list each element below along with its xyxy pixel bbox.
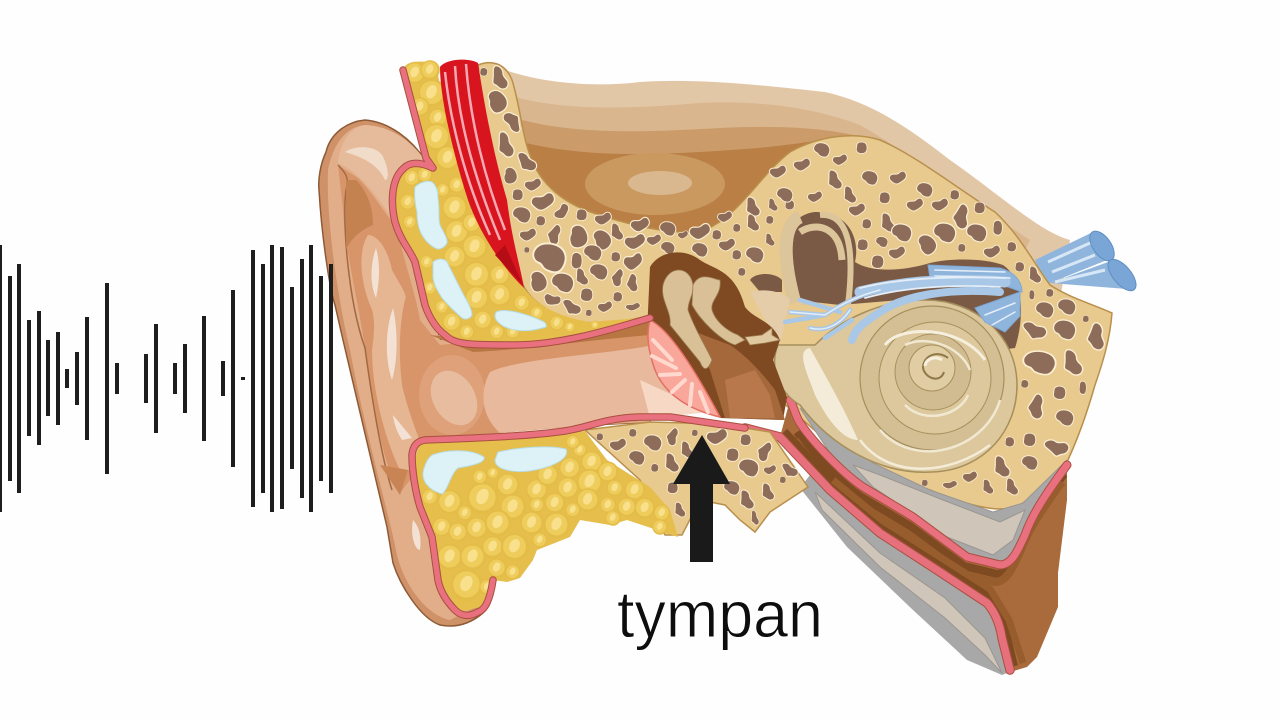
upper helix [338, 125, 425, 228]
ear canal and pinna [319, 120, 710, 626]
canal [483, 345, 705, 433]
helix groove line [338, 165, 392, 490]
lower bone [585, 422, 808, 535]
antihelix highlights [372, 248, 421, 550]
middle ear cavity [647, 252, 787, 420]
upper helix highlight [345, 147, 388, 180]
bone pores, upper bone [480, 66, 1111, 495]
concha wedge [380, 465, 408, 495]
lower fat tissue [412, 431, 678, 612]
upper fat tissue [393, 60, 640, 345]
concha shadow [346, 180, 373, 250]
temporal bone [478, 63, 1112, 509]
tragus ring [419, 355, 485, 435]
vestibule patch [750, 274, 790, 345]
fat tissue fluid pockets, upper [415, 181, 546, 331]
semicircular canals and inner dark cavity [786, 212, 1021, 350]
pinna inner skin [328, 125, 650, 620]
lower pink skin line [412, 417, 745, 615]
pink membrane bands [745, 400, 1067, 670]
shadow beneath upper canal wall [430, 322, 650, 352]
antihelix [361, 235, 428, 470]
pinna outer rim [319, 120, 650, 626]
concha [338, 165, 650, 493]
fat tissue fluid pockets, lower [423, 447, 567, 494]
tragus [421, 362, 487, 434]
eardrum [648, 320, 720, 417]
arrow pointing to the eardrum [673, 435, 730, 562]
upper pink skin line [392, 70, 650, 345]
outer skin layers above the bone [505, 70, 1070, 300]
lower skin, grey and brown layers [780, 400, 1067, 675]
auditory nerve bundles [785, 265, 1022, 340]
ossicles [663, 270, 780, 369]
label: tympan: tympan [617, 577, 823, 651]
bone pores, lower bone [596, 426, 800, 525]
sound wave [0, 245, 333, 512]
cochlea spiral [775, 300, 1017, 472]
auditory nerve ends outside the skull [1035, 227, 1141, 295]
temporalis muscle [440, 60, 524, 288]
